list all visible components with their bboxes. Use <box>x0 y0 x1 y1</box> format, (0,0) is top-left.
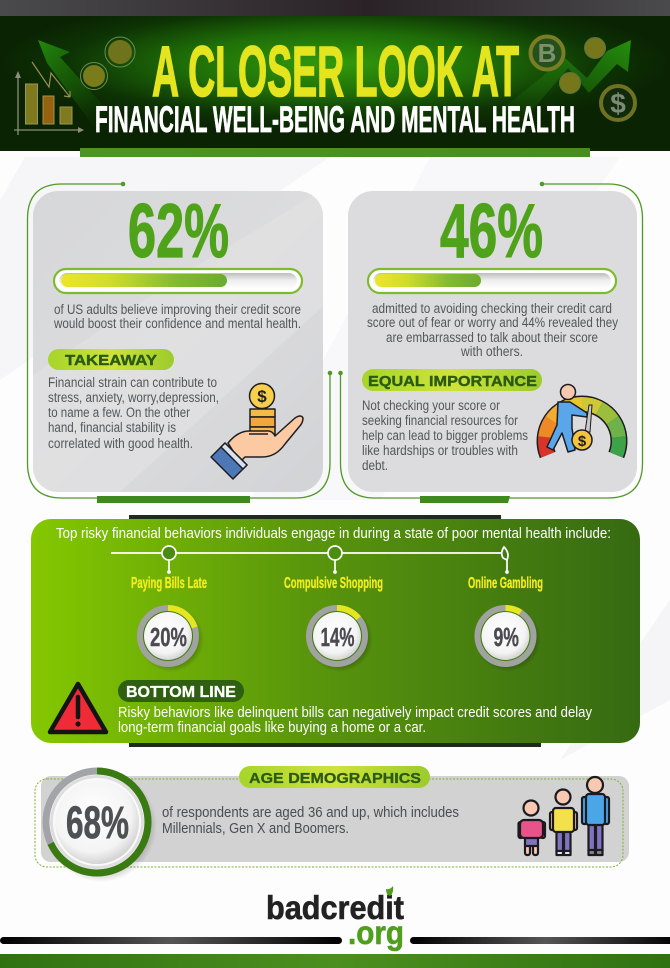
panel: age demographics <box>35 766 629 882</box>
stat: 46%: 46% <box>440 189 543 274</box>
text: takeaway: hand, financial stability is <box>48 420 176 435</box>
icon: bitcoin and dollar coins right: $ <box>610 88 626 119</box>
text: equal importance: Not checking your score or <box>362 398 500 413</box>
text: 46% description <box>367 301 618 359</box>
icon: bitcoin and dollar coins right <box>530 36 635 120</box>
text: equal importance <box>362 398 528 473</box>
text: equal importance: like hardships or troubles with <box>362 443 518 458</box>
dial: 14% <box>307 606 373 672</box>
text: takeaway: Financial strain can contribute to <box>48 375 217 390</box>
label: paying bills late: Paying Bills Late <box>131 575 207 592</box>
text: bottom line: long-term financial goals like buying a home or a car. <box>118 720 426 736</box>
logo: badcredit.org <box>266 886 404 951</box>
label: online gambling: Online Gambling <box>468 575 543 592</box>
text: 62% description: would boost their confidence and mental health. <box>53 316 301 331</box>
icon: coins left <box>80 37 135 90</box>
text: bottom line <box>118 705 593 736</box>
icon: three people <box>518 777 609 855</box>
header banner <box>0 16 670 157</box>
panel: risky financial behaviors <box>31 515 640 747</box>
text: bottom line: Risky behaviors like delinquent bills can negatively impact credit scores and delay <box>118 705 593 721</box>
dial: 68% <box>45 770 157 882</box>
icon: credit score gauge with person <box>545 384 619 455</box>
text: 62% description: of US adults believe improving their credit score <box>54 302 301 317</box>
panel: 46% card <box>338 182 642 503</box>
dial: 20%: 20% <box>150 622 187 652</box>
icon: hand holding coins: $ <box>257 387 267 406</box>
text: equal importance: debt. <box>362 458 388 473</box>
dial: 9% <box>475 606 541 672</box>
text: takeaway <box>48 375 219 451</box>
header accent bar <box>80 148 590 157</box>
dial: 14%: 14% <box>320 622 354 652</box>
text: takeaway: to name a few. On the other <box>48 405 190 420</box>
age demographics pill: AGE DEMOGRAPHICS <box>249 770 421 787</box>
timeline <box>111 546 508 573</box>
text: age demographics: of respondents are aged 36 and up, which includes <box>162 805 459 821</box>
text: 62% description <box>53 302 301 331</box>
icon: declining bar chart <box>14 62 84 135</box>
equal importance pill <box>362 369 542 391</box>
logo: badcredit.org: .org <box>348 914 404 951</box>
label: compulsive shopping: Compulsive Shopping <box>284 575 383 592</box>
text: 46% description: admitted to avoiding checking their credit card <box>372 301 612 316</box>
icon: rising and falling arrows <box>38 40 631 135</box>
footer line right <box>410 937 670 944</box>
text: equal importance: seeking financial resources for <box>362 413 518 428</box>
text: 46% description: score out of fear or worry and 44% revealed they <box>367 315 618 330</box>
dial: 68%: 68% <box>66 797 129 848</box>
bottom line pill: BOTTOM LINE <box>126 684 236 701</box>
icon: hand holding coins <box>211 384 303 479</box>
progress bar: 62% <box>54 269 302 293</box>
top bar <box>0 0 670 16</box>
text: age demographics <box>162 805 459 837</box>
text: 46% description: with others. <box>460 344 523 359</box>
age demographics pill <box>239 766 430 788</box>
text: takeaway: stress, anxiety, worry,depression, <box>48 390 219 405</box>
heading: risky behaviors: Top risky financial behaviors individuals engage in during a state of poor mental health include: <box>56 526 611 542</box>
dial: 20% <box>138 606 204 672</box>
panel: 62% card <box>28 182 332 503</box>
bottom line pill <box>118 680 244 702</box>
progress bar: 46% <box>368 269 616 293</box>
equal importance pill: EQUAL IMPORTANCE <box>368 373 537 390</box>
takeaway pill <box>48 349 174 370</box>
icon: bitcoin and dollar coins right: B <box>538 38 556 68</box>
footer line left <box>0 937 342 944</box>
icon: warning triangle <box>50 684 106 732</box>
takeaway pill: TAKEAWAY <box>65 352 157 369</box>
dial: 9%: 9% <box>494 622 519 652</box>
footer bar <box>0 954 670 968</box>
logo: badcredit.org: badcredit <box>266 889 404 926</box>
icon: credit score gauge with person: $ <box>578 433 587 450</box>
text: takeaway: correlated with good health. <box>48 436 193 451</box>
text: 46% description: are embarrassed to talk about their score <box>386 330 598 345</box>
text: age demographics: Millennials, Gen X and Boomers. <box>162 821 349 837</box>
text: equal importance: help can lead to bigger problems <box>362 428 528 443</box>
stat: 62%: 62% <box>128 189 229 274</box>
